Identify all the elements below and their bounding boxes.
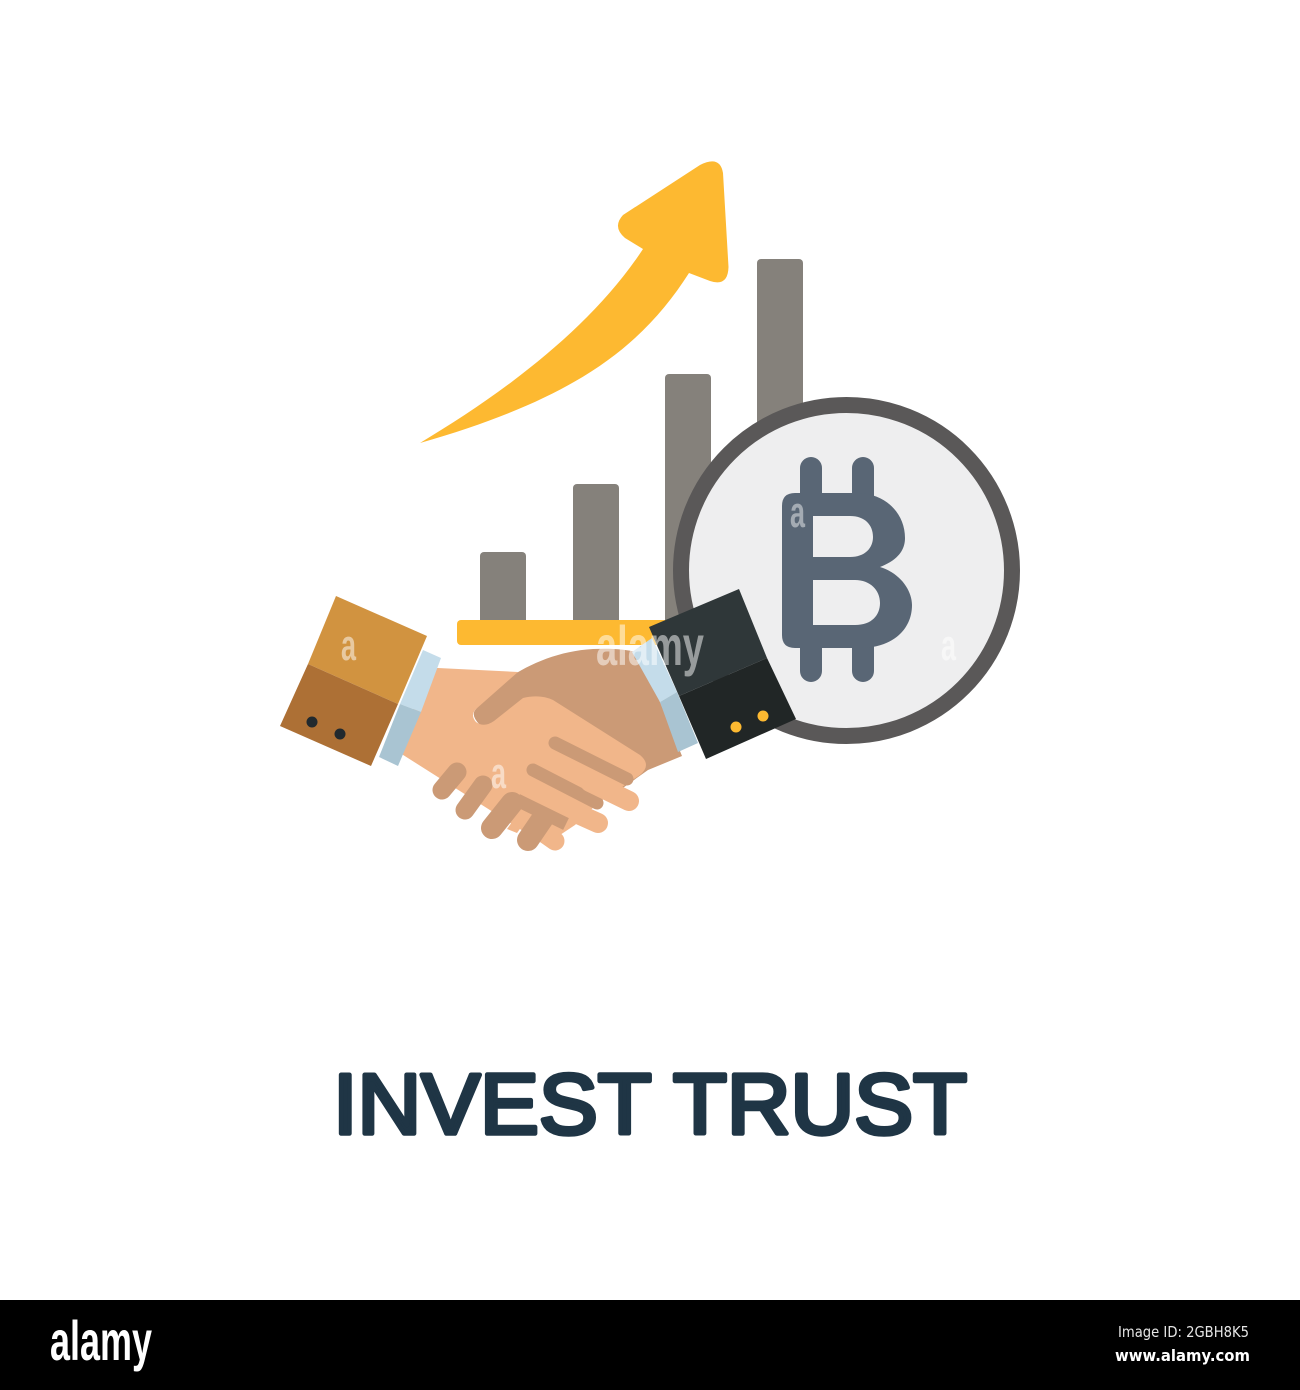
chart base bar (457, 620, 682, 645)
handshake (400, 649, 682, 845)
growth arrow (420, 161, 728, 443)
dark fingers (442, 772, 543, 840)
watermark: a (941, 621, 956, 670)
bitcoin coin (681, 405, 1012, 736)
fingertip (538, 829, 555, 841)
website: www.alamy.com (1115, 1346, 1250, 1365)
left sleeve (280, 596, 427, 766)
watermark (341, 488, 956, 798)
footer bar (0, 1300, 1300, 1390)
left cuff (379, 650, 441, 766)
palm creases (533, 743, 627, 803)
right hand (474, 649, 682, 790)
bitcoin symbol (782, 468, 912, 671)
bar chart (480, 259, 803, 624)
finger gap (507, 811, 530, 833)
watermark: a (790, 488, 805, 537)
title: INVEST TRUST (333, 1058, 967, 1152)
image id: Image ID: 2GBH8K5 (1118, 1323, 1249, 1341)
left hand (400, 668, 646, 845)
watermark: a (491, 749, 506, 798)
footer logo: alamy (50, 1309, 152, 1372)
watermark: a (341, 621, 356, 670)
right cuff (632, 638, 698, 752)
finger joint band (517, 800, 566, 824)
right sleeve (649, 589, 796, 759)
watermark: alamy (596, 614, 704, 677)
light fingers (560, 782, 629, 823)
